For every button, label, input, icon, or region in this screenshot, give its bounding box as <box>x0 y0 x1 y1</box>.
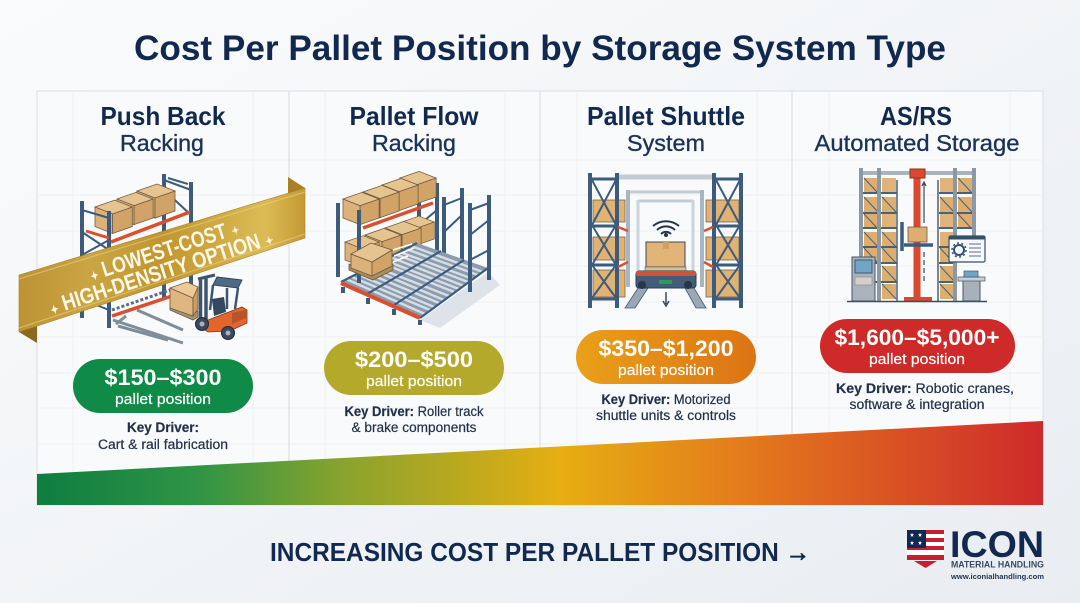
ribbon: lowest-cost high-density option: ✦ HIGH-DENSITY OPTION ✦ <box>46 224 276 320</box>
price pill: 350-1200 <box>576 330 756 384</box>
heading: pallet flow: Pallet Flow <box>350 101 479 131</box>
icon: shuttle system <box>590 173 741 308</box>
forklift <box>196 275 247 340</box>
subheading: racking: Racking <box>120 130 204 156</box>
subheading: automated storage: Automated Storage <box>814 130 1020 156</box>
forklift pallet <box>170 282 198 320</box>
price pill: 1600-5000 <box>820 319 1015 373</box>
cost gradient wedge <box>37 421 1043 505</box>
key driver text: & brake components <box>352 420 477 435</box>
key driver text <box>596 392 736 423</box>
key driver text: shuttle units & controls <box>596 408 736 423</box>
title: Cost Per Pallet Position by Storage System Type <box>134 29 946 68</box>
price pill: 150-300 <box>73 359 253 413</box>
logo shield <box>907 530 944 568</box>
icon: automated crane <box>847 168 987 302</box>
logo: icon material handling: MATERIAL HANDLING <box>951 560 1044 570</box>
price pill: 200-500: pallet position <box>366 374 462 390</box>
column: pallet flow racking <box>324 101 504 435</box>
heading: pallet shuttle: Pallet Shuttle <box>587 101 745 131</box>
price pill: 150-300: $150–$300 <box>104 365 222 390</box>
logo: icon material handling: www.iconialhandling.com <box>950 572 1044 581</box>
key driver text: Key Driver: <box>127 420 199 435</box>
chart panel <box>37 91 1043 505</box>
subheading: system: System <box>627 130 705 156</box>
key driver text: Cart & rail fabrication <box>98 437 228 452</box>
icon: push back rack with forklift <box>82 174 247 343</box>
heading: as/rs: AS/RS <box>880 101 952 131</box>
icon: wifi signal <box>653 221 679 237</box>
column: pallet shuttle system <box>576 101 756 423</box>
column: as/rs automated storage <box>814 101 1020 412</box>
axis caption: INCREASING COST PER PALLET POSITION → <box>270 537 810 567</box>
logo: icon material handling <box>907 524 1044 581</box>
key driver text: Key Driver: Motorized <box>602 392 730 407</box>
ribbon: lowest-cost high-density option: ✦ LOWEST-COST ✦ <box>86 214 242 286</box>
price pill: 200-500 <box>324 341 504 395</box>
control monitor with gear <box>949 236 985 301</box>
price pill: 350-1200: pallet position <box>618 363 714 379</box>
kiosk <box>852 257 875 301</box>
logo: icon material handling: ICON <box>950 524 1044 565</box>
price pill: 150-300: pallet position <box>115 392 211 408</box>
price pill: 1600-5000: $1,600–$5,000+ <box>834 325 1000 350</box>
key driver text: Key Driver: Roller track <box>344 404 484 419</box>
key driver text <box>836 381 1014 412</box>
key driver text <box>344 404 484 435</box>
icon: pallet flow rack <box>338 171 500 328</box>
arrow: shuttle motion <box>663 292 669 306</box>
subheading: racking: Racking <box>372 130 456 156</box>
price pill: 1600-5000: pallet position <box>869 352 965 368</box>
ribbon: lowest-cost high-density option <box>19 177 305 343</box>
key driver text: software & integration <box>850 397 984 412</box>
price pill: 200-500: $200–$500 <box>355 347 473 372</box>
key driver text: Key Driver: Robotic cranes, <box>836 381 1014 396</box>
column: push back racking <box>73 101 253 452</box>
price pill: 350-1200: $350–$1,200 <box>598 336 734 361</box>
key driver text <box>98 420 228 452</box>
heading: push back: Push Back <box>100 101 226 131</box>
